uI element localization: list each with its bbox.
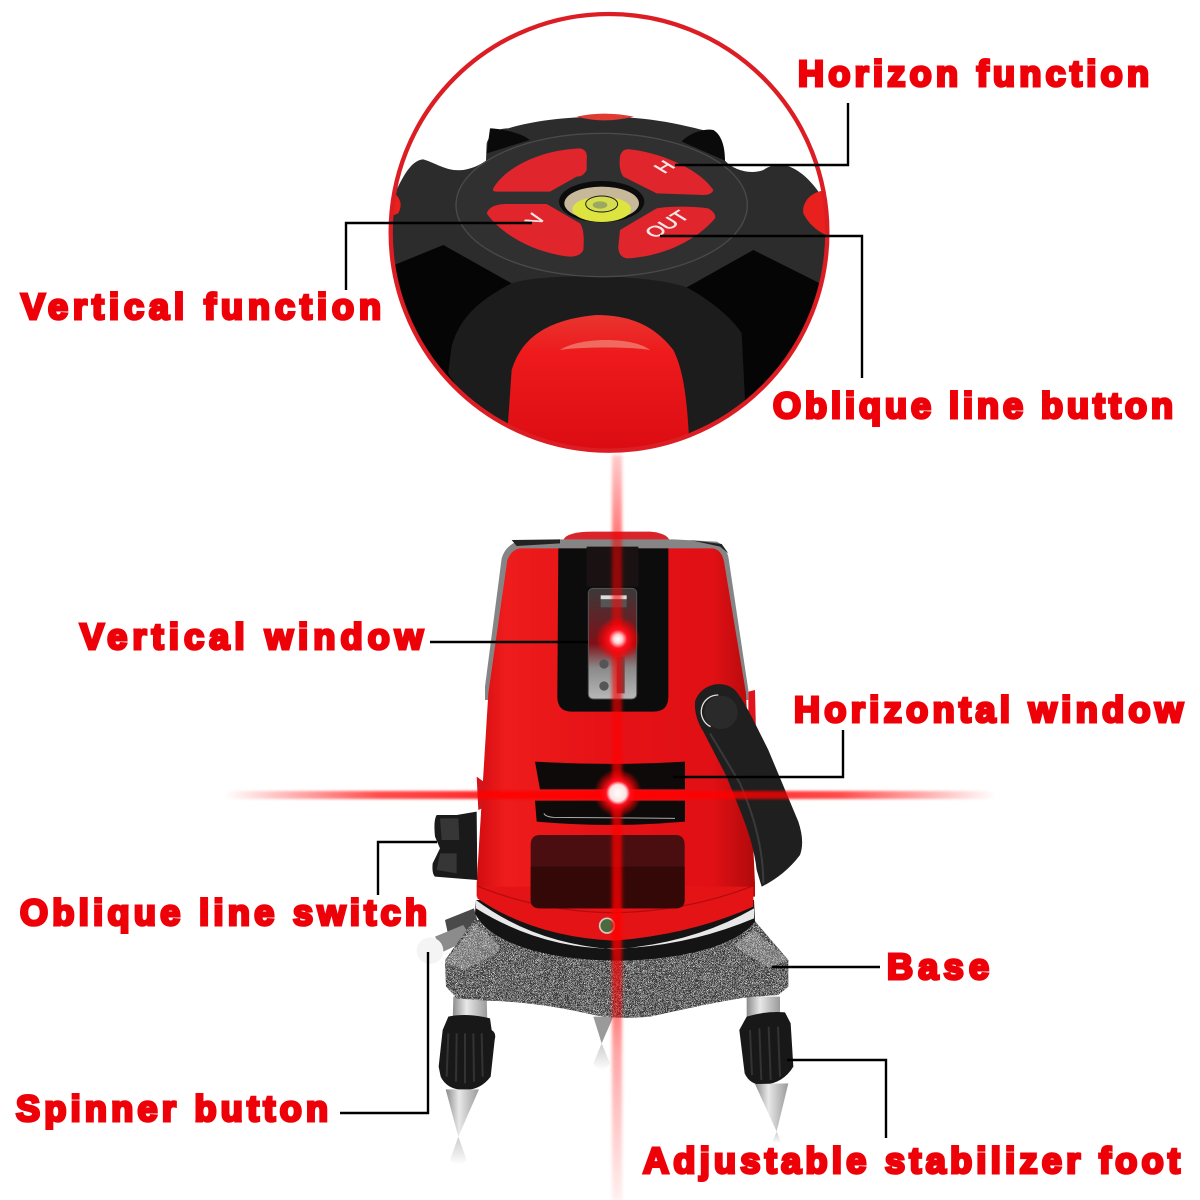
photo: close-up of control panel in red circle <box>387 14 833 467</box>
leader line: Spinner button <box>340 952 428 1113</box>
black vertical panel <box>557 548 668 712</box>
cap <box>508 315 689 448</box>
cast base <box>445 920 788 1018</box>
screw <box>600 918 614 933</box>
left knurled knob <box>439 1015 495 1090</box>
upper housing <box>432 532 802 897</box>
red body <box>477 548 755 897</box>
leader line: Base <box>772 966 880 968</box>
label: Adjustable stabilizer foot: Adjustable stabilizer foot <box>643 1140 1180 1181</box>
label: Vertical function: Vertical function <box>21 286 381 327</box>
label: Horizontal window: Horizontal window <box>794 689 1184 730</box>
spikes <box>446 1089 479 1137</box>
leader line: Vertical function <box>346 223 532 290</box>
red side tabs <box>577 114 634 120</box>
tripod posts <box>453 997 487 1023</box>
cast base and feet <box>417 900 793 1165</box>
dark lower window <box>531 835 685 908</box>
button: H <box>620 149 713 195</box>
white ring <box>476 900 754 949</box>
leader line: Horizontal window <box>673 730 843 777</box>
label: Oblique line button: Oblique line button <box>773 385 1173 426</box>
button: V <box>487 204 584 257</box>
spinner knob <box>417 908 480 964</box>
leader line: Adjustable stabilizer foot <box>787 1060 886 1138</box>
label: Oblique line switch: Oblique line switch <box>20 892 427 933</box>
leader line: Vertical window <box>430 641 588 643</box>
leader line: Oblique line switch <box>378 842 437 895</box>
lower red band and ring <box>476 835 754 949</box>
horizontal window slots <box>535 762 685 789</box>
button: OUT <box>618 207 715 258</box>
button: V: V <box>521 211 552 227</box>
label: Base: Base <box>887 946 989 987</box>
laser dot: vertical window <box>596 617 640 661</box>
laser dot: horizontal window <box>594 769 642 817</box>
bubble vial <box>559 181 644 222</box>
leader line: Oblique line button <box>660 236 862 378</box>
red band <box>477 887 753 941</box>
label: Vertical window: Vertical window <box>80 616 424 657</box>
vertical window <box>588 588 637 699</box>
strap <box>695 684 802 887</box>
label: Horizon function: Horizon function <box>798 53 1149 94</box>
base bevel corners <box>445 923 788 970</box>
photo: laser level body <box>225 455 995 1200</box>
label: Spinner button: Spinner button <box>16 1088 328 1129</box>
button: H: H <box>649 158 681 177</box>
right knurled knob <box>739 1012 793 1085</box>
laser lines <box>225 455 995 1200</box>
leader line: Horizon function <box>675 103 848 165</box>
side knob <box>432 812 477 880</box>
button: OUT: OUT <box>640 208 695 242</box>
button: top left <box>493 148 587 192</box>
panel body <box>392 117 826 374</box>
